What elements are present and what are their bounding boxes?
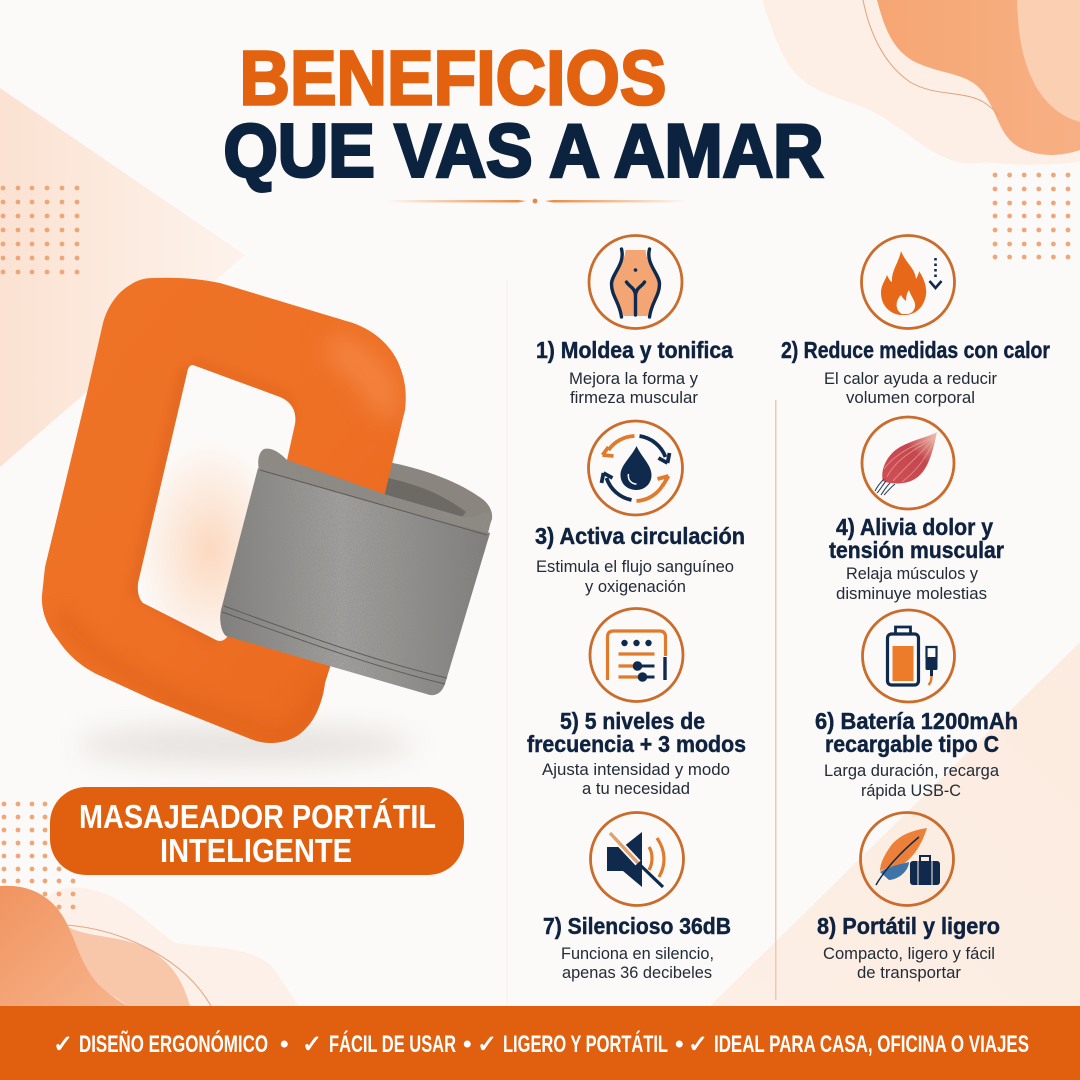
description: rápida USB-C — [861, 782, 961, 800]
heading: recargable tipo C — [825, 731, 999, 757]
heading: 6) Batería 1200mAh — [815, 708, 1018, 734]
benefit 4 — [829, 417, 1004, 603]
bottom banner: • — [463, 1031, 472, 1058]
callout pill: product name: MASAJEADOR PORTÁTIL — [79, 798, 436, 835]
orange ring — [42, 278, 406, 743]
bottom banner: ✓ — [477, 1030, 497, 1058]
benefit 8 — [817, 812, 1000, 982]
description — [823, 945, 995, 982]
description: Relaja músculos y — [846, 565, 979, 583]
heading: 1) Moldea y tonifica — [536, 337, 733, 363]
description: de transportar — [857, 964, 961, 982]
hole glow — [135, 440, 285, 660]
description — [824, 370, 997, 407]
benefit 1 — [536, 236, 733, 407]
band inner wall — [380, 478, 466, 520]
heading — [829, 514, 1004, 563]
benefit 3 — [535, 421, 745, 596]
description — [536, 558, 734, 596]
description — [542, 761, 730, 798]
bottom banner — [0, 1006, 1080, 1080]
band front face — [220, 468, 490, 695]
shape: bottom right peach triangle — [710, 642, 1080, 1006]
description — [561, 945, 714, 982]
bottom banner: DISEÑO ERGONÓMICO — [79, 1030, 268, 1058]
heading: 5) 5 niveles de — [560, 708, 705, 734]
bottom banner: • — [675, 1031, 684, 1058]
heading — [527, 708, 746, 757]
bottom banner: ✓ — [53, 1030, 73, 1058]
icon: muted speaker — [590, 812, 684, 906]
product: orange ring with gray band — [30, 265, 492, 765]
benefit 7 — [543, 812, 731, 982]
description: Funciona en silencio, — [561, 945, 714, 963]
icon: hips silhouette — [589, 236, 682, 328]
shape: bottom left blobs — [0, 886, 298, 1006]
shape: top right blobs — [762, 0, 1080, 165]
bottom banner: • — [280, 1031, 289, 1058]
band stitching — [222, 470, 487, 684]
benefit 2 — [781, 236, 1050, 407]
title line: BENEFICIOS: BENEFICIOS — [240, 36, 666, 122]
description: a tu necesidad — [582, 780, 690, 798]
description — [824, 762, 1000, 800]
dot grid: top right — [993, 173, 1070, 259]
callout pill: product name: INTELIGENTE — [160, 832, 352, 869]
dot grid: top left — [1, 186, 79, 274]
column divider right — [775, 400, 776, 1000]
icon: muscle — [862, 417, 954, 509]
column divider left — [506, 280, 508, 1005]
description: El calor ayuda a reducir — [824, 370, 997, 388]
benefit 5 — [527, 608, 746, 798]
icon: feather and suitcase — [860, 812, 954, 906]
bottom banner: LIGERO Y PORTÁTIL — [503, 1030, 668, 1058]
icon: blood drop with circular arrows — [588, 421, 682, 515]
description: Compacto, ligero y fácil — [823, 945, 995, 963]
callout pill: product name — [50, 787, 464, 875]
heading: frecuencia + 3 modos — [527, 731, 746, 757]
description — [569, 370, 699, 407]
title line: QUE VAS A AMAR: QUE VAS A AMAR — [224, 108, 824, 192]
description — [836, 565, 987, 603]
heading — [815, 708, 1018, 757]
icon: battery with USB-C cable — [862, 610, 954, 702]
description: volumen corporal — [846, 389, 975, 407]
heading: 8) Portátil y ligero — [817, 913, 1000, 939]
description: Estimula el flujo sanguíneo — [536, 558, 734, 576]
title divider — [385, 199, 688, 203]
description: y oxigenación — [585, 578, 686, 596]
bottom banner: FÁCIL DE USAR — [329, 1030, 456, 1058]
shape: left peach triangle — [0, 88, 245, 467]
benefit 6 — [815, 610, 1018, 800]
bottom banner: ✓ — [688, 1030, 708, 1058]
dot grid: lower left — [2, 802, 75, 909]
band back wall — [380, 462, 492, 530]
description: Mejora la forma y — [569, 370, 699, 388]
band top rim — [258, 449, 492, 533]
description: apenas 36 decibeles — [562, 964, 712, 982]
heading: tensión muscular — [829, 537, 1004, 563]
description: firmeza muscular — [570, 389, 699, 407]
bottom banner: ✓ — [302, 1030, 322, 1058]
description: Ajusta intensidad y modo — [542, 761, 730, 779]
heading: 3) Activa circulación — [535, 523, 745, 549]
description: disminuye molestias — [836, 585, 987, 603]
heading: 4) Alivia dolor y — [836, 514, 993, 540]
heading: 7) Silencioso 36dB — [543, 913, 731, 939]
icon: control panel sliders — [590, 608, 683, 702]
icon: flame with down arrow — [862, 236, 954, 328]
title — [224, 36, 824, 192]
floor shadow — [75, 725, 415, 765]
description: Larga duración, recarga — [824, 762, 1000, 780]
